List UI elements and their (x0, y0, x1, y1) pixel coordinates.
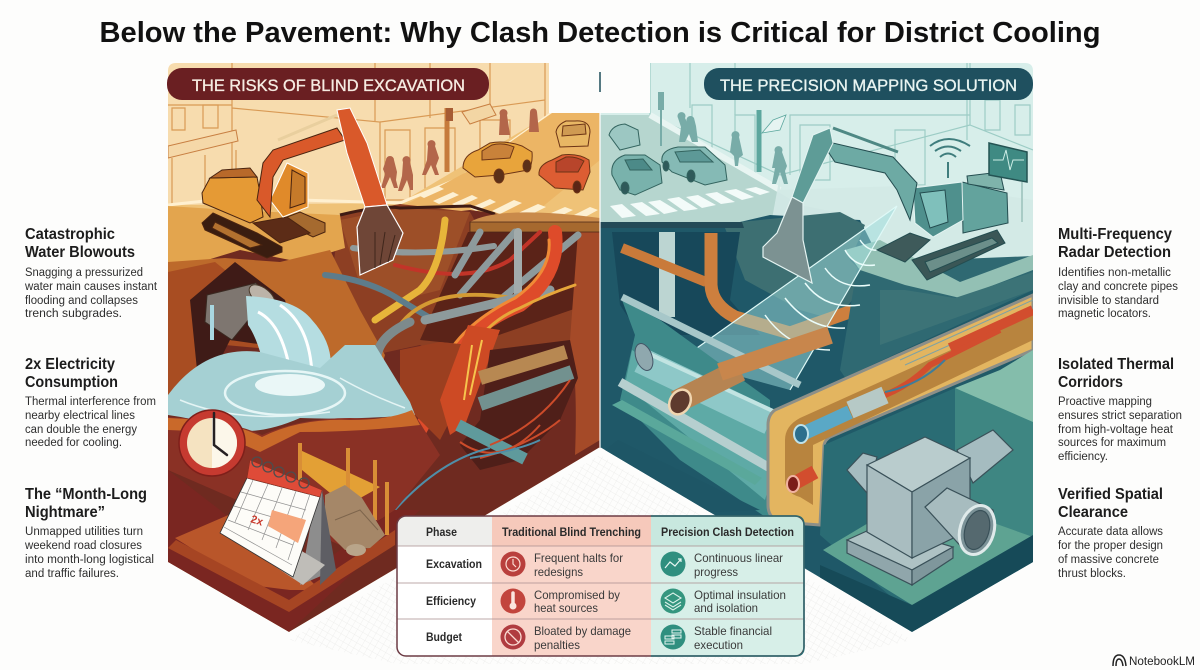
pit back wall (334, 204, 572, 368)
right text: radar detection: magnetic locators. (1058, 308, 1151, 320)
flood pool (168, 345, 415, 431)
row: excavation: progress (694, 565, 738, 579)
decorative mesh (289, 455, 912, 664)
calendar: 2x (249, 513, 265, 529)
monitor (989, 143, 1027, 222)
left text: water blowouts (24, 226, 158, 320)
row: excavation: redesigns (534, 565, 583, 579)
left text: electricity: Thermal interference from (25, 396, 156, 408)
left text: electricity: Consumption (25, 374, 118, 391)
left text: month-long nightmare: and traffic failures. (25, 568, 119, 580)
buildings left (168, 63, 545, 205)
row: excavation: Excavation (426, 557, 482, 571)
vertical white pipe (659, 232, 675, 317)
water stream (246, 296, 330, 368)
red rock pillar (400, 342, 461, 440)
right text: thermal corridors (1058, 356, 1182, 463)
panel: precision mapping solution (600, 63, 1033, 635)
heading pill: solution: THE PRECISION MAPPING SOLUTION (720, 76, 1017, 95)
support pipes and cables (325, 220, 578, 430)
row: efficiency: heat sources (534, 601, 598, 615)
buildings right (650, 63, 1033, 185)
left text: month-long nightmare: The “Month-Long (25, 486, 147, 503)
right text: spatial clearance: Clearance (1058, 504, 1128, 521)
right text: thermal corridors: efficiency. (1058, 451, 1108, 463)
right text: spatial clearance: Verified Spatial (1058, 486, 1163, 503)
right text: spatial clearance: for the proper design (1058, 540, 1163, 552)
left text: month-long nightmare: Unmapped utilities turn (25, 526, 143, 538)
row: budget: Budget (426, 630, 462, 644)
right text: spatial clearance: of massive concrete (1058, 554, 1159, 566)
row: excavation (426, 551, 783, 579)
right text: thermal corridors: from high-voltage heat (1058, 424, 1174, 436)
left text: month-long nightmare: into month-long logistical (25, 554, 154, 566)
row: budget: execution (694, 638, 743, 652)
right text: radar detection: Identifies non-metallic (1058, 267, 1171, 279)
crosswalk (420, 186, 598, 216)
notebooklm logo: NotebookLM (1129, 656, 1195, 668)
row: budget: penalties (534, 638, 580, 652)
left text: water blowouts: trench subgrades. (25, 308, 122, 320)
clock (179, 410, 245, 476)
right text: spatial clearance (1058, 486, 1163, 580)
pit right wall (570, 232, 600, 455)
left text: electricity (25, 356, 156, 449)
right text: thermal corridors: Corridors (1058, 374, 1123, 391)
awning (168, 130, 238, 158)
left text: month-long nightmare: weekend road closures (24, 540, 142, 552)
heading pill: risks (167, 68, 489, 100)
row: efficiency: Efficiency (426, 594, 476, 608)
row: budget: Bloated by damage (534, 624, 631, 638)
radar beam (680, 206, 897, 390)
soil right lower (870, 290, 1033, 630)
glass trench (620, 301, 770, 516)
thrust block (847, 430, 1013, 585)
crosswalk (610, 187, 770, 218)
ground and underground (600, 215, 1033, 635)
left text: water blowouts: Water Blowouts (25, 244, 135, 261)
heading pill: risks: THE RISKS OF BLIND EXCAVATION (192, 76, 465, 95)
left text: water blowouts: Snagging a pressurized (25, 267, 143, 279)
table header (426, 525, 794, 539)
comparison table (397, 516, 804, 656)
main pipes (620, 297, 830, 468)
right road slab (470, 212, 600, 222)
chamber floor (823, 495, 1033, 605)
right text: radar detection: clay and concrete pipes (1058, 281, 1178, 293)
table header: Precision Clash Detection (661, 525, 794, 539)
excavator (763, 128, 1008, 283)
right text: spatial clearance: thrust blocks. (1058, 568, 1126, 580)
water pipe (204, 282, 258, 340)
cars (609, 124, 727, 195)
right text: radar detection: Multi-Frequency (1058, 226, 1172, 243)
right text: thermal corridors: sources for maximum (1058, 437, 1166, 449)
pedestrians (658, 92, 788, 184)
street (168, 126, 600, 218)
chamber (820, 388, 955, 604)
right text: thermal corridors: ensures strict separation (1058, 410, 1182, 422)
row: budget (426, 624, 772, 652)
pit dark (168, 210, 600, 632)
row: efficiency: and isolation (694, 601, 758, 615)
street (600, 115, 777, 222)
row: efficiency: Compromised by (534, 588, 620, 602)
barrier and rubble (300, 443, 387, 556)
copper pipe (622, 248, 706, 282)
cars (463, 121, 590, 193)
left text: electricity: 2x Electricity (25, 356, 115, 373)
row: efficiency (426, 588, 786, 615)
right ground mesa (840, 256, 1033, 377)
row: budget: Stable financial (694, 624, 772, 638)
title: Below the Pavement: Why Clash Detection is Critical for District Cooling (100, 17, 1100, 49)
panel: risks of blind excavation (168, 63, 600, 633)
underground wall (612, 232, 740, 335)
right text: radar detection: Radar Detection (1058, 244, 1171, 261)
excavator (202, 108, 403, 275)
right text: thermal corridors: Proactive mapping (1058, 396, 1152, 408)
table header: Phase (426, 525, 457, 539)
soil band (168, 415, 440, 545)
left text: electricity: nearby electrical lines (25, 410, 135, 422)
right text: spatial clearance: Accurate data allows (1058, 526, 1163, 538)
insulated corridor casing (768, 295, 1033, 525)
left text: electricity: can double the energy (25, 424, 137, 436)
right text: thermal corridors: Isolated Thermal (1058, 356, 1174, 373)
right text: radar detection (1058, 226, 1178, 320)
right text: radar detection: invisible to standard (1058, 295, 1159, 307)
buried pipes (395, 352, 572, 510)
heading pill: solution (704, 68, 1033, 100)
left text: month-long nightmare: Nightmare” (25, 504, 105, 521)
left text: water blowouts: water main causes instant (24, 281, 158, 293)
row: efficiency: Optimal insulation (694, 588, 786, 602)
antenna and wifi (930, 139, 970, 178)
divider (599, 113, 601, 447)
left text: water blowouts: Catastrophic (25, 226, 115, 243)
left text: electricity: needed for cooling. (25, 437, 122, 449)
row: excavation: Continuous linear (694, 551, 783, 565)
pedestrians (381, 108, 539, 191)
left text: water blowouts: flooding and collapses (25, 295, 138, 307)
calendar (220, 457, 336, 585)
table header: Traditional Blind Trenching (502, 525, 641, 539)
left ground mesa (168, 206, 345, 262)
row: excavation: Frequent halts for (534, 551, 623, 565)
left text: month-long nightmare (24, 486, 154, 580)
